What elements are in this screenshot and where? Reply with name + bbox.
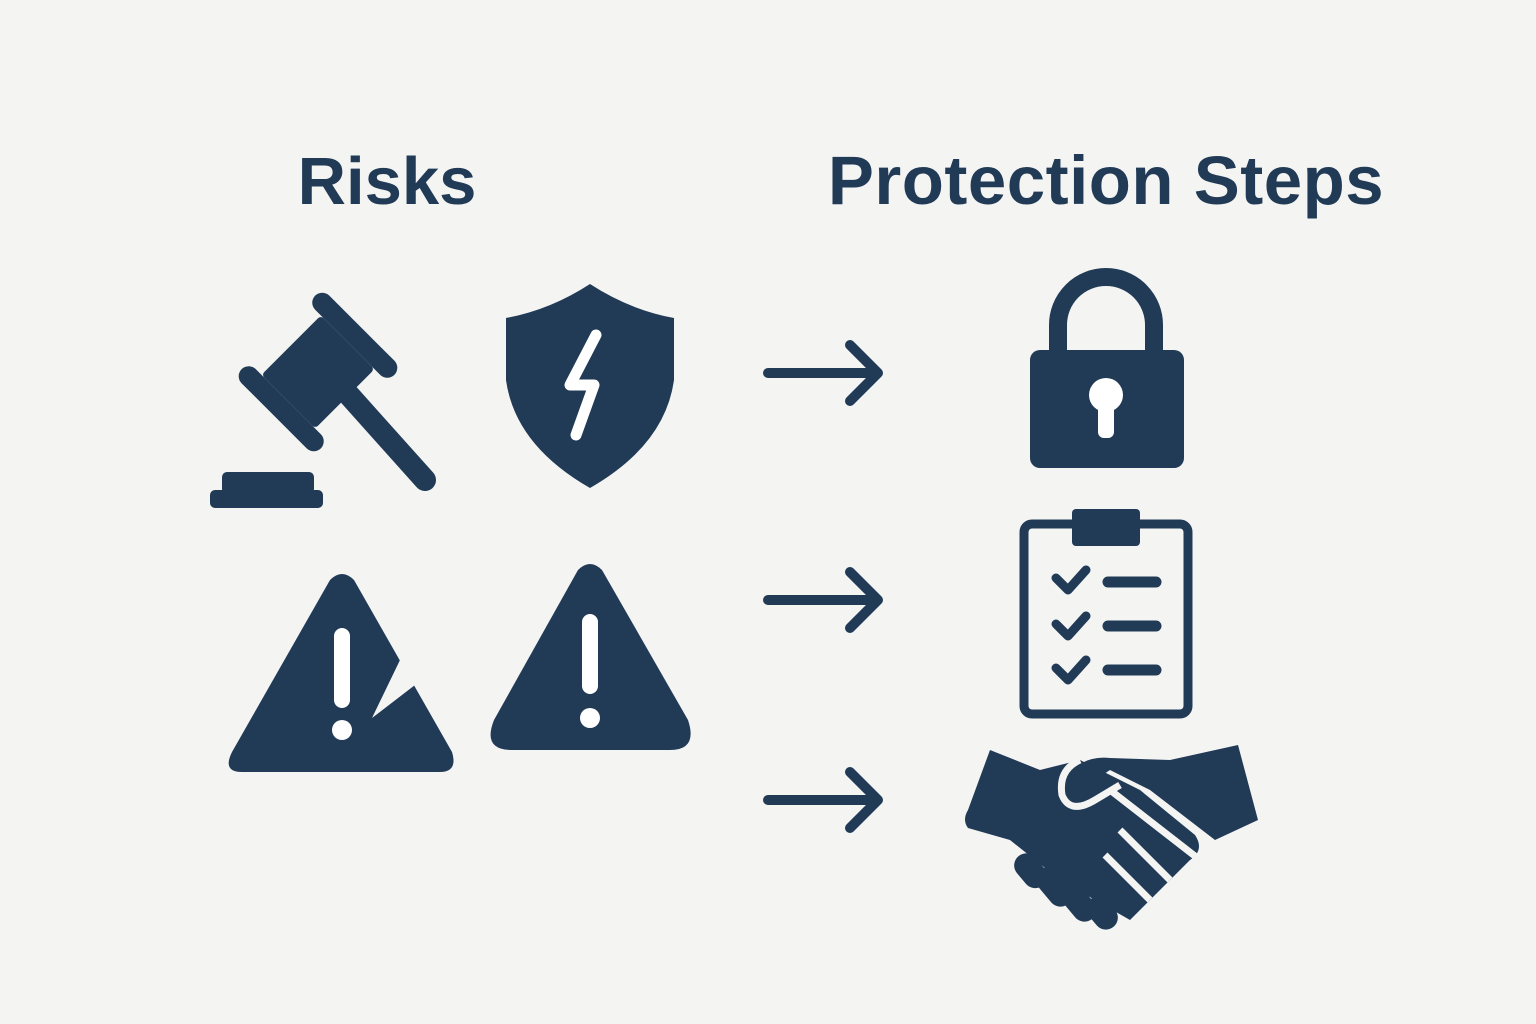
icon: padlock (1030, 277, 1184, 468)
icon: gavel (210, 289, 425, 508)
icon: shield with lightning (506, 284, 674, 488)
icon: handshake (965, 745, 1258, 935)
arrow 1 (768, 345, 878, 401)
icon: cracked warning triangle (229, 574, 454, 772)
icon: warning triangle (491, 564, 691, 750)
title: Protection Steps: Protection Steps (828, 142, 1384, 219)
icon: checklist clipboard (1024, 509, 1188, 714)
title: Risks: Risks (298, 144, 476, 219)
arrow 2 (768, 572, 878, 628)
arrow 3 (768, 772, 878, 828)
